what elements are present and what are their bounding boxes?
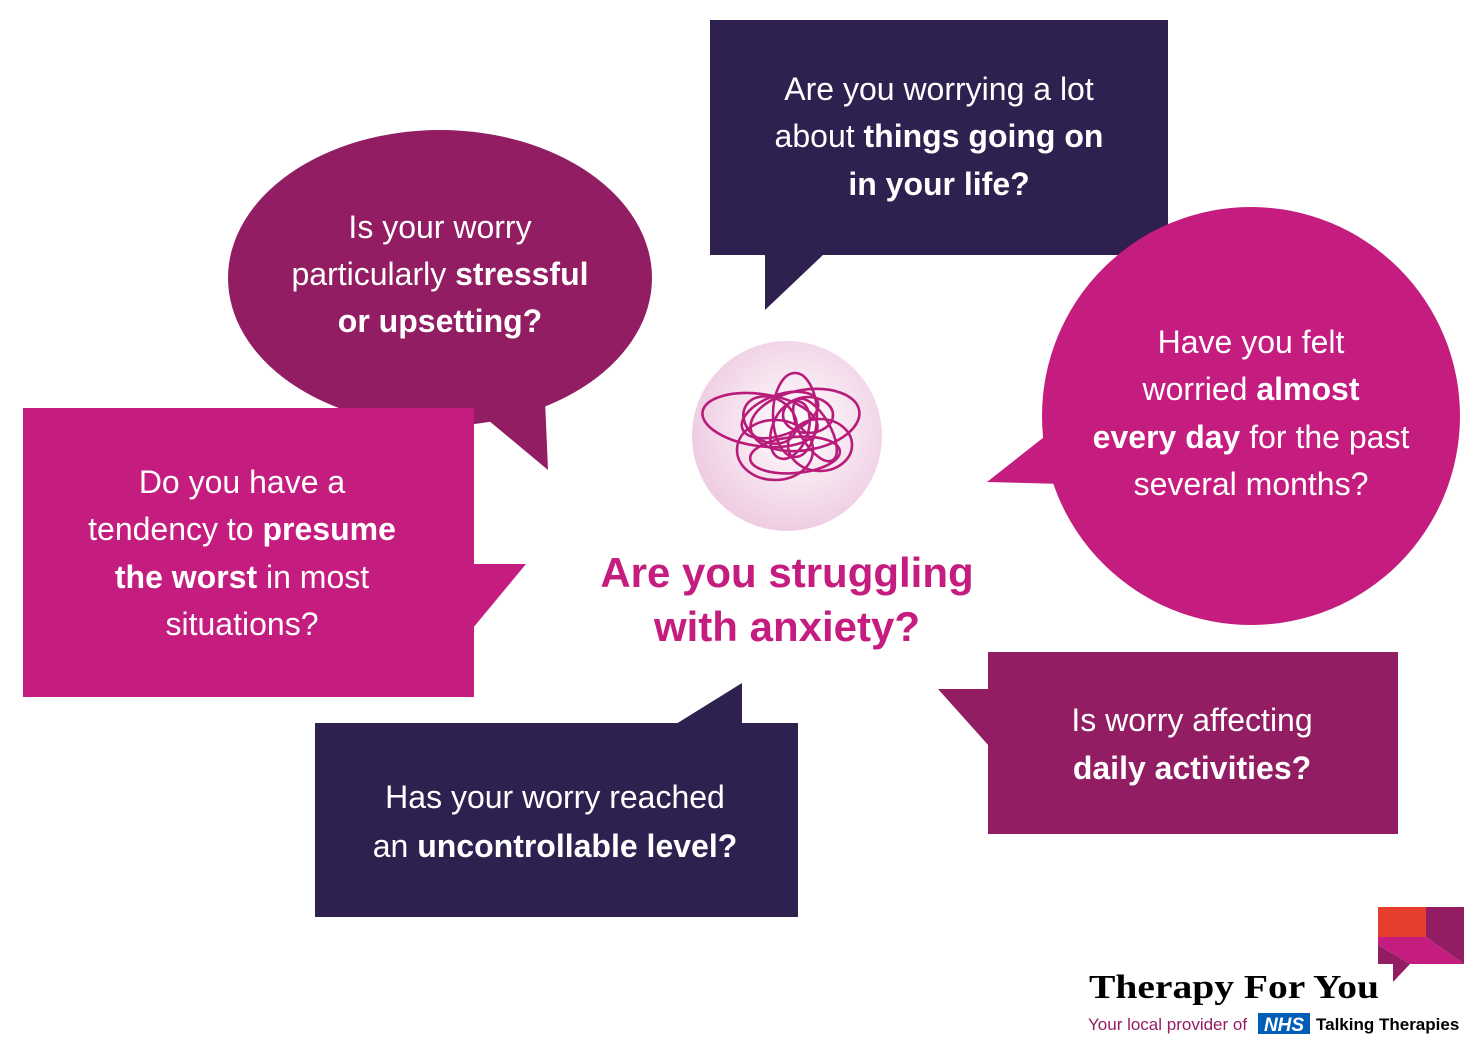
- bubble: worrying a lot: about things going on: [775, 118, 1103, 154]
- bubble: presume the worst: tendency to presume: [88, 511, 396, 547]
- logo: NHS: [1264, 1015, 1304, 1036]
- logo: Talking Therapies: [1316, 1015, 1459, 1034]
- logo: Your local provider of: [1088, 1015, 1247, 1034]
- bubble: uncontrollable: Has your worry reached: [385, 779, 725, 815]
- bubble: every day: worried almost: [1142, 371, 1360, 407]
- bubble: every day: several months?: [1134, 466, 1368, 502]
- bubble: worrying a lot: in your life?: [848, 166, 1030, 202]
- bubble: daily activities: daily activities?: [1073, 750, 1311, 786]
- bubble: presume the worst: Do you have a: [139, 464, 345, 500]
- bubble: daily activities: [938, 652, 1398, 834]
- bubble: every day: Have you felt: [1158, 324, 1344, 360]
- bubble: worrying a lot: Are you worrying a lot: [784, 71, 1094, 107]
- bubble: uncontrollable: an uncontrollable level?: [373, 828, 737, 864]
- title: with anxiety?: [653, 603, 920, 650]
- bubble: daily activities: Is worry affecting: [1071, 702, 1313, 738]
- bubble: every day: [987, 207, 1460, 625]
- title: [600, 549, 974, 650]
- bubble: stressful: or upsetting?: [338, 303, 542, 339]
- bubble: presume the worst: situations?: [166, 606, 318, 642]
- bubble: every day: every day for the past: [1093, 419, 1409, 455]
- logo: [1088, 907, 1464, 1036]
- title: Are you struggling: [600, 549, 974, 596]
- bubble: stressful: particularly stressful: [292, 256, 588, 292]
- bubble: presume the worst: the worst in most: [115, 559, 369, 595]
- bubble: stressful: Is your worry: [348, 209, 532, 245]
- bubble: worrying a lot: [710, 20, 1168, 310]
- bubble: presume the worst: [23, 408, 526, 697]
- icon: tangled scribble: [692, 341, 882, 531]
- bubble: uncontrollable: [315, 683, 798, 917]
- logo: Therapy For You: [1089, 969, 1379, 1006]
- bubble: stressful: [228, 130, 652, 470]
